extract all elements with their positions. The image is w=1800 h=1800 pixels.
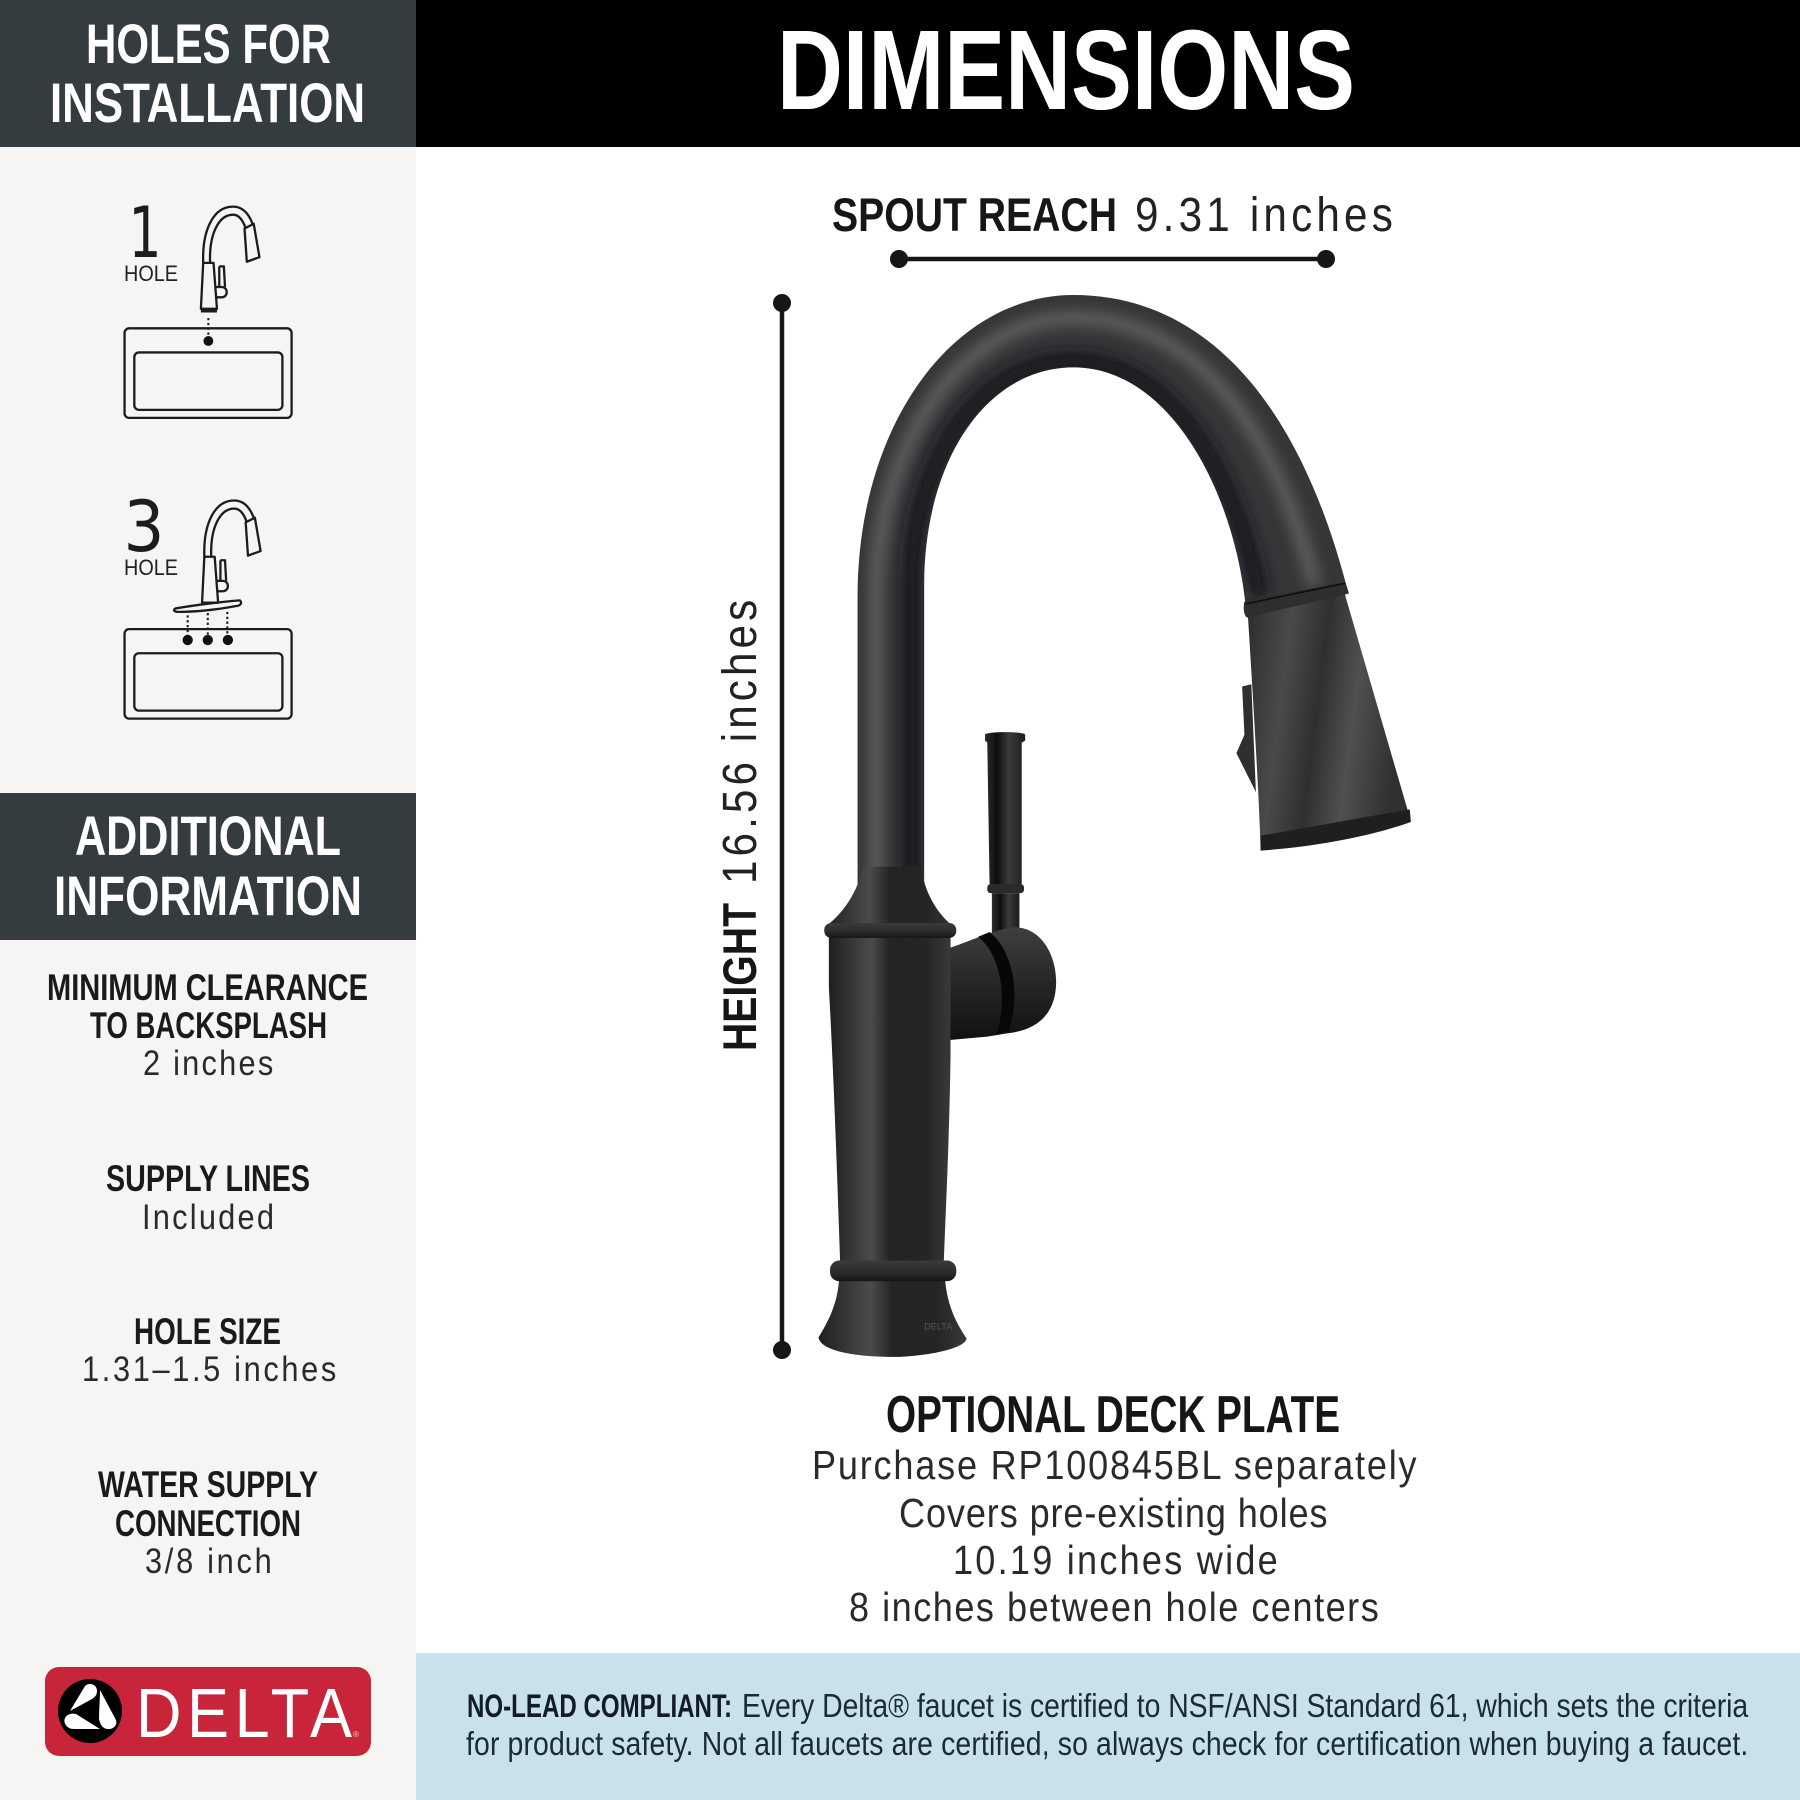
text: hole size: 1.31–1.5 inches [82,1349,336,1388]
icon: three hole installation: HOLE [124,555,178,580]
text: water supply connection [98,1464,318,1580]
callout: height: HEIGHT [713,903,766,1051]
text: hole size: HOLE SIZE [134,1311,281,1352]
text: supply lines: SUPPLY LINES [106,1158,310,1199]
text: supply lines: Included [142,1197,274,1236]
callout: height [712,294,791,1359]
logo: delta: DELTA [136,1675,353,1753]
icon: three hole installation: 3 [124,486,164,568]
text: water supply connection: 3/8 inch [145,1541,272,1580]
text: supply lines [106,1158,310,1236]
logo: delta [45,1667,371,1756]
panel: no-lead compliant note: NO-LEAD COMPLIANT: [467,1688,732,1724]
title: dimensions: DIMENSIONS [777,7,1355,133]
header: additional information: INFORMATION [54,864,362,927]
handle hub [948,927,1056,1040]
header: additional information [0,793,416,940]
text: optional deck plate: OPTIONAL DECK PLATE [886,1386,1340,1444]
panel: no-lead compliant note: for product safety. Not all faucets are certified, so always check for certification when buying a faucet. [466,1725,1748,1763]
panel: no-lead compliant note: Every Delta® faucet is certified to NSF/ANSI Standard 61, which sets the criteria [742,1687,1749,1725]
faucet body: DELTA [924,1321,953,1331]
title: dimensions [416,0,1800,147]
text: optional deck plate: 8 inches between hole centers [849,1585,1379,1631]
text: optional deck plate: Covers pre-existing holes [899,1491,1328,1537]
text: hole size [82,1311,336,1388]
text: minimum clearance: TO BACKSPLASH [90,1005,327,1046]
callout: spout reach: 9.31 inches [1135,187,1393,242]
text: water supply connection: CONNECTION [115,1503,301,1544]
panel: no-lead compliant note [416,1653,1800,1800]
callout: height: 16.56 inches [712,600,767,884]
callout: spout reach: SPOUT REACH [832,188,1117,241]
text: optional deck plate: Purchase RP100845BL separately [812,1443,1417,1489]
icon: three hole installation [124,486,292,719]
spray head [1236,582,1411,851]
text: minimum clearance [47,967,368,1082]
logo: delta: ® [353,1730,359,1739]
text: optional deck plate [812,1386,1417,1631]
text: minimum clearance: 2 inches [143,1043,273,1082]
header: holes for installation: INSTALLATION [50,71,365,134]
text: optional deck plate: 10.19 inches wide [953,1538,1278,1584]
header: additional information: ADDITIONAL [75,804,341,867]
lever [985,732,1025,939]
callout: spout reach [832,187,1393,268]
icon: one hole installation: HOLE [124,261,178,286]
text: water supply connection: WATER SUPPLY [98,1464,318,1505]
header: holes for installation: HOLES FOR [86,12,331,75]
header: holes for installation [0,0,416,147]
spout [858,295,1345,884]
panel: left sidebar background [0,0,416,1800]
faucet body [819,867,967,1357]
icon: one hole installation [124,192,292,418]
icon: one hole installation: 1 [128,192,161,274]
text: minimum clearance: MINIMUM CLEARANCE [47,967,368,1008]
illustration: faucet [819,295,1411,1357]
